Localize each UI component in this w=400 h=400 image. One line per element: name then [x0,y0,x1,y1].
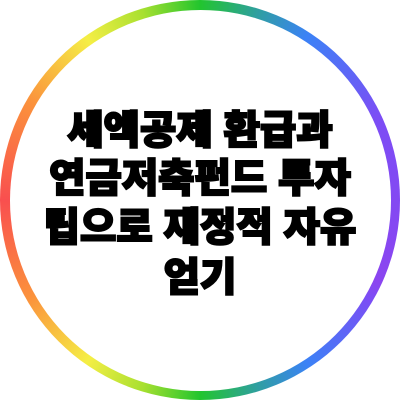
title line 3: 팁으로 재정적 자유 [44,206,356,250]
title line 2: 연금저축펀드 투자 [49,157,351,201]
title line 4: 얻기 [164,256,236,300]
title line 1: 세액공제 환급과 [67,109,333,153]
